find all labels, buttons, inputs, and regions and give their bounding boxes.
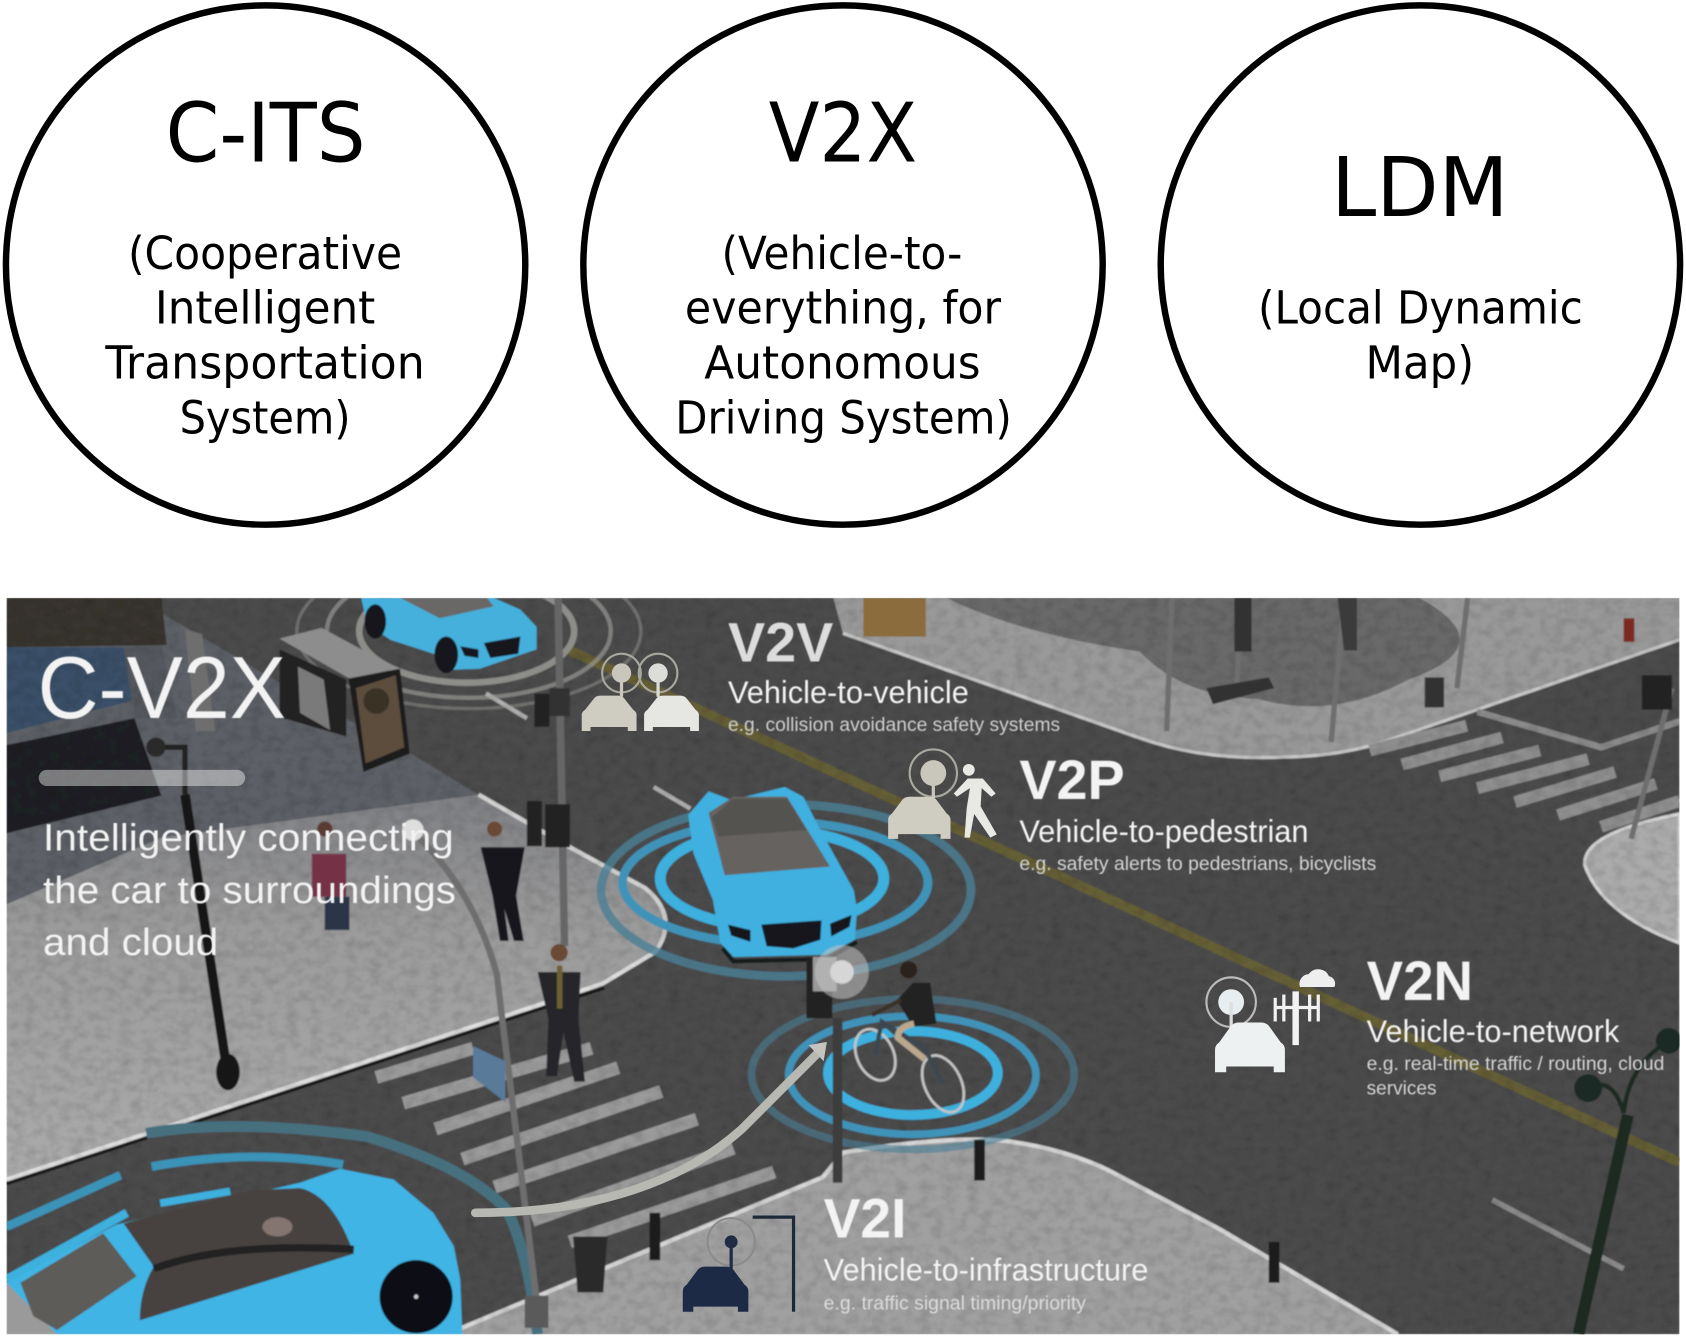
icon: V2I car and signal [683,1217,794,1312]
heading: C-V2X: C-V2X [38,638,286,737]
car: top blue [361,598,537,673]
text: Vehicle-to-everything: Autonomous [704,336,981,389]
crosswalk: left [376,1048,774,1242]
label: V2P: Vehicle-to-pedestrian [1019,814,1309,849]
text: tagline: Intelligently connecting [43,816,454,858]
label: V2P [1019,748,1376,875]
panel: C-V2X street scene [6,554,1682,1334]
text: Cooperative Intelligent Transportation System: Intelligent [155,282,375,335]
sidewalk: left, lit [6,795,666,1180]
sidewalk: upper left, shaded [6,598,479,904]
text: Vehicle-to-everything: Driving System) [675,391,1012,444]
icon: V2P car and pedestrian [888,749,997,839]
label: V2V: Vehicle-to-vehicle [728,675,969,710]
car: centre blue [688,787,857,961]
text: Cooperative Intelligent Transportation System: System) [180,391,351,444]
rings: bottom car [6,1126,538,1334]
icon: V2N car, tower and cloud [1206,969,1335,1072]
text: tagline: and cloud [43,921,218,963]
heading: C-ITS: C-ITS [166,86,366,181]
text: Cooperative Intelligent Transportation System: (Cooperative [128,227,402,280]
divider bar [39,770,245,786]
label: V2I: Vehicle-to-infrastructure [824,1253,1148,1288]
heading: LDM: LDM [1331,141,1509,236]
label: V2N: services [1367,1078,1437,1100]
label: V2I: e.g. traffic signal timing/priority [824,1293,1086,1315]
text: tagline [43,816,456,963]
person: background pedestrian [185,629,215,731]
text: Vehicle-to-everything: (Vehicle-to- [722,227,962,280]
rings: centre car [601,804,971,976]
person: woman [481,821,525,941]
label: V2N: e.g. real-time traffic / routing, cloud [1367,1053,1664,1075]
car: bottom blue [6,1169,462,1334]
person: cyclist [852,960,966,1115]
label: V2I [824,1187,1148,1315]
road: yellow centre line [570,651,1680,1162]
circle: LDM [1161,5,1680,525]
text: Local Dynamic Map: Map) [1366,336,1474,389]
text: Vehicle-to-everything [675,227,1012,444]
text: Local Dynamic Map: (Local Dynamic [1258,282,1583,335]
rings: cyclist [752,999,1074,1149]
label: V2N [1367,949,1664,1100]
building: left [6,598,167,647]
arrow: V2I link to traffic light [475,1042,827,1213]
label: V2I: V2I [824,1187,906,1250]
sidewalk: top right [833,598,1680,758]
traffic lights [527,675,1672,1018]
bus stop [280,628,410,772]
sidewalk: bottom [446,1140,1398,1334]
label: V2V: e.g. collision avoidance safety systems [728,714,1060,736]
person: red shirt [312,821,349,930]
rings: top car [294,598,643,710]
circle: C-ITS [6,5,525,525]
poles [146,598,1682,1334]
circle: V2X [583,5,1103,525]
icon: V2V two cars [582,654,699,731]
label: V2V [728,610,1060,736]
person: far pedestrian [1338,598,1357,651]
text: Local Dynamic Map [1258,282,1583,389]
text: Cooperative Intelligent Transportation System [104,227,425,444]
text: tagline: the car to surroundings [43,869,456,911]
text: Cooperative Intelligent Transportation System: Transportation [104,336,425,389]
texture [6,598,1680,1334]
heading: V2X: V2X [769,86,917,181]
label: V2P: e.g. safety alerts to pedestrians, bicyclists [1019,853,1376,875]
sidewalk: right corner [1585,814,1680,943]
person: man in suit [538,944,585,1082]
text: Vehicle-to-everything: everything, for [685,282,1001,335]
label: V2N: V2N [1367,949,1473,1012]
people [185,598,1357,1119]
road: lane dashes [1492,1200,1624,1269]
label: V2P: V2P [1019,748,1125,811]
street furniture [473,598,1634,1292]
scene: road and sidewalks [6,554,1682,1334]
label: V2V: V2V [728,610,833,673]
label: V2N: Vehicle-to-network [1367,1014,1620,1049]
crosswalk: right [1370,726,1680,827]
